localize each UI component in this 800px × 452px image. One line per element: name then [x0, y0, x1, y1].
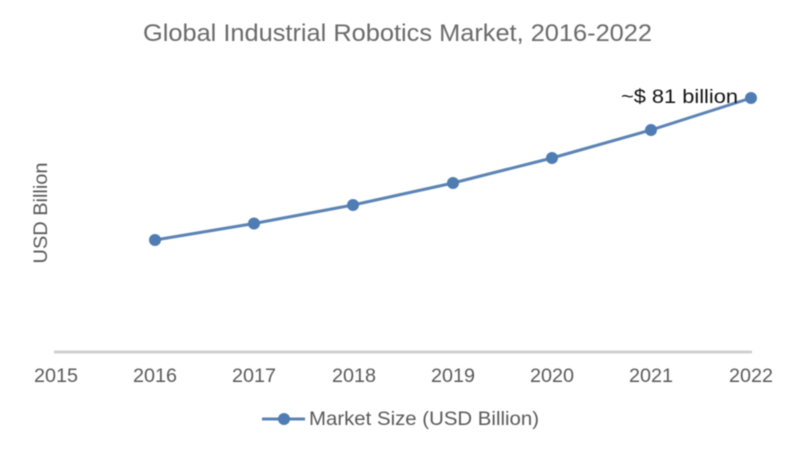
data line: market size [149, 92, 757, 246]
y axis title: USD Billion [31, 163, 52, 263]
callout: 2022 value: ~$ 81 billion [621, 87, 738, 108]
x axis labels: 2021 [629, 366, 673, 387]
x axis labels: 2018 [332, 366, 376, 387]
x axis labels: 2016 [133, 366, 177, 387]
x axis labels: 2020 [530, 366, 574, 387]
x axis line [54, 350, 752, 354]
x axis labels [34, 366, 773, 387]
title: Global Industrial Robotics Market, 2016-2022 [143, 20, 652, 47]
x axis labels: 2019 [431, 366, 475, 387]
x axis labels: 2022 [729, 366, 773, 387]
legend: Market Size (USD Billion) [309, 408, 539, 430]
x axis labels: 2015 [34, 366, 78, 387]
x axis labels: 2017 [232, 366, 276, 387]
